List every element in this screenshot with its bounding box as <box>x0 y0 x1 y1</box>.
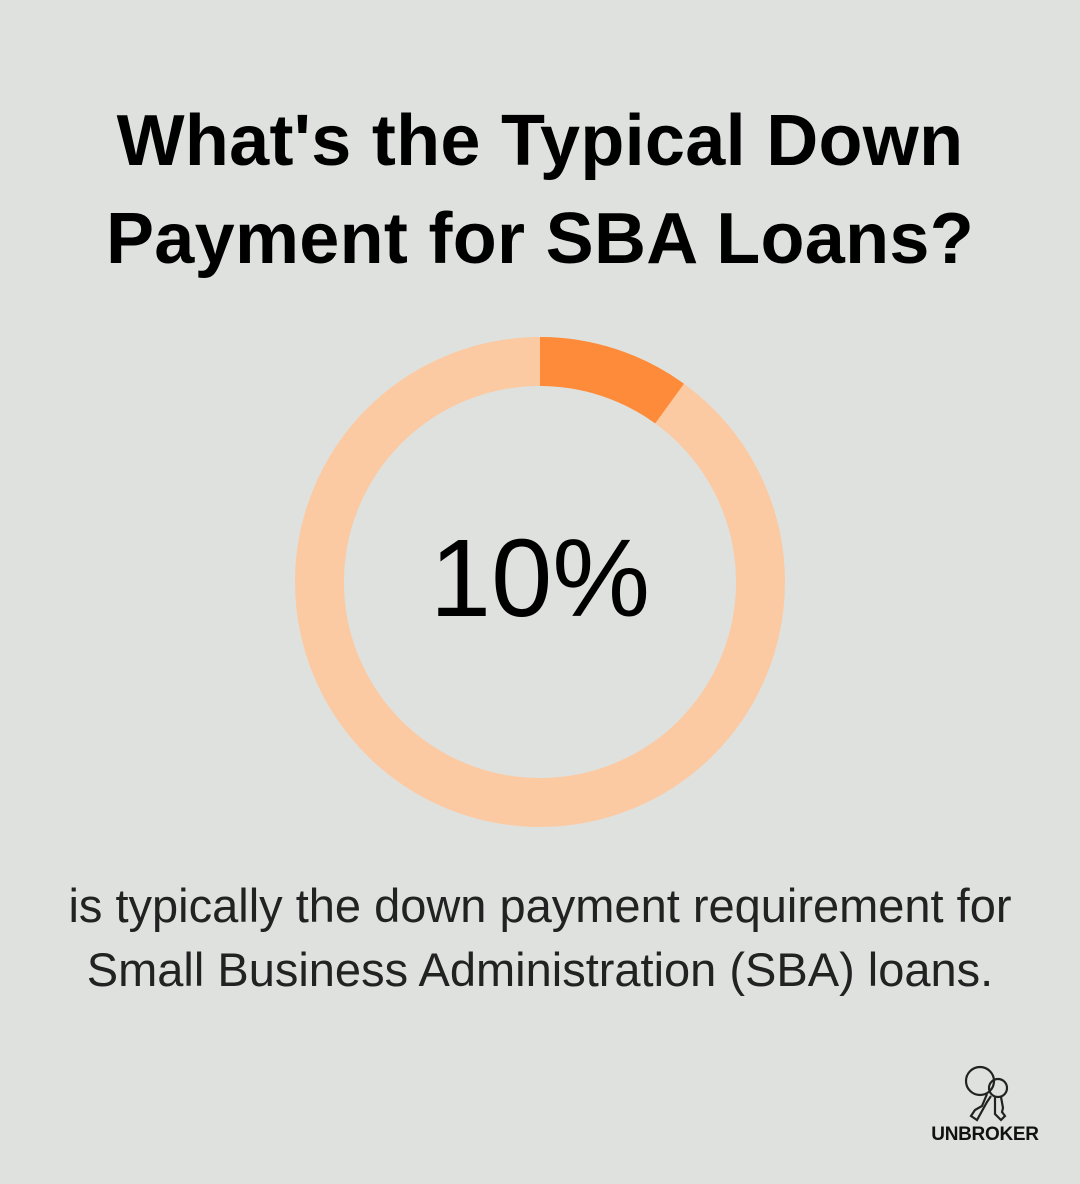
logo text: UNBROKER <box>931 1124 1039 1145</box>
donut segment: 10% <box>540 362 670 404</box>
title: Payment for SBA Loans? <box>106 199 974 279</box>
title <box>106 101 974 279</box>
description text: Small Business Administration (SBA) loans. <box>87 943 993 996</box>
icon: keys <box>964 1066 1008 1122</box>
logo: unbroker <box>931 1066 1039 1145</box>
donut ring: background <box>320 362 760 802</box>
title: What's the Typical Down <box>117 101 963 181</box>
description text: is typically the down payment requirement for <box>68 879 1012 932</box>
big number: 10% <box>430 517 650 640</box>
description text <box>68 879 1012 996</box>
